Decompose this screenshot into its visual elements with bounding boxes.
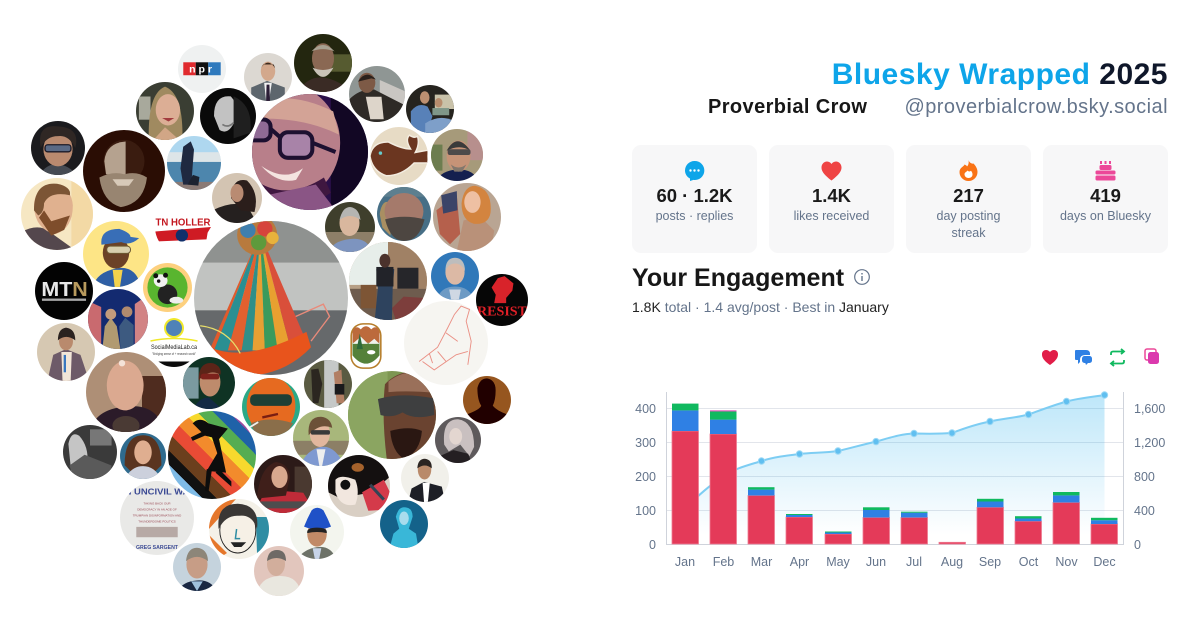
title: Bluesky Wrapped 2025: [832, 58, 1168, 91]
profile display name: Proverbial Crow: [708, 96, 867, 118]
avatar: man in suit: [244, 53, 292, 101]
x axis month labels: Nov: [1055, 555, 1078, 569]
avatar: book cover An Uncivil War: TAKING BACK OUR: [143, 502, 171, 506]
icon: flame: [960, 160, 978, 181]
avatar: black and white woman: [200, 88, 256, 144]
avatar: woman by fireplace: [349, 242, 427, 320]
avatar: person on the beach: [167, 136, 221, 190]
avatar: cartoon face with teal and orange: [209, 499, 269, 559]
avatar: bearded man in blue light: [377, 187, 431, 241]
avatar: hooded blue figure: [380, 500, 428, 548]
stat value: 60 · 1.2K: [656, 185, 733, 206]
avatar: chocolate whale: [370, 127, 428, 185]
y axis left labels: 300: [635, 436, 656, 450]
avatar: spaniel dog: [328, 455, 390, 517]
avatar: woman in red dress broadcast: [254, 455, 312, 513]
avatar: handshake in front of flags: [88, 289, 148, 349]
x axis month labels: Aug: [941, 555, 963, 569]
x axis month labels: Feb: [713, 555, 734, 569]
stat value: 1.4K: [812, 185, 851, 206]
stat label: streak: [951, 226, 986, 240]
stat card: day posting streak: [906, 145, 1031, 253]
cumulative line: [685, 395, 1104, 509]
bars: replies: [672, 410, 1118, 534]
avatar: NPR logo: [178, 45, 226, 93]
legend: quotes squares: [1145, 349, 1159, 364]
y axis right labels: 400: [1134, 504, 1155, 518]
avatar: girl with flag painting: [433, 183, 501, 251]
avatar: smiling man with glasses in garden: [431, 129, 483, 181]
avatar: blonde woman selfie: [136, 82, 194, 140]
cumulative area: [685, 395, 1104, 544]
stat label: posts · replies: [656, 209, 733, 223]
avatar: party hat, largest bubble: [194, 221, 348, 375]
avatar: group on a porch: [406, 85, 454, 133]
avatar: MTN logo: MTN: [41, 279, 88, 301]
avatar: book cover An Uncivil War: TRUMPIAN DISINFORMATION AND: [133, 514, 181, 518]
avatar: sunglasses man close-up: [348, 371, 436, 459]
x axis month labels: May: [826, 555, 851, 569]
avatar: park badge: [350, 323, 382, 369]
bars: likes: [672, 431, 1118, 544]
avatar: book cover An Uncivil War: AN UNCIVIL WAR: [118, 487, 196, 496]
avatar: man with glasses and dark hair: [31, 121, 85, 175]
engagement chart: stacked bars with cumulative area line: [635, 391, 1165, 569]
avatar: rainbow silhouette of Nancy Drew: [168, 411, 256, 499]
icon: info: [854, 269, 870, 285]
avatar: man in black blazer: [401, 454, 449, 502]
avatar: man with cigar: [294, 34, 352, 92]
bars: reposts: [672, 404, 1118, 532]
stat value: 217: [953, 185, 984, 206]
avatar: side-profile man with beard: [21, 178, 93, 250]
avatar: TN Holler logo: [155, 217, 211, 242]
y axis right labels: [1134, 402, 1165, 552]
icon: heart: [822, 162, 842, 180]
avatar: dark-haired woman with glasses: [212, 173, 262, 223]
y axis left labels: 200: [635, 470, 656, 484]
legend: reposts arrows: [1111, 349, 1124, 366]
bars: quotes: [710, 410, 736, 411]
avatar: book cover An Uncivil War: THUNDERDOME POLITICS: [138, 519, 176, 523]
legend: likes heart: [1042, 350, 1058, 365]
chart legend icons: [1042, 348, 1159, 367]
y axis left labels: 0: [649, 538, 656, 552]
x axis month labels: Sep: [979, 555, 1001, 569]
avatar: George Takei portrait: [325, 202, 375, 252]
avatar: man in white sweater: [254, 546, 304, 596]
stat label: day posting: [937, 209, 1000, 223]
stat label: likes received: [794, 209, 869, 223]
avatar: smiling man on blue: [431, 252, 479, 300]
avatar: MTN logo: [35, 262, 93, 320]
y axis right labels: 0: [1134, 538, 1141, 552]
avatar: line drawing on pale ground: [404, 301, 488, 385]
avatar: book cover An Uncivil War: DEMOCRACY IN AN AGE OF: [137, 508, 177, 512]
y axis left labels: 400: [635, 402, 656, 416]
avatar: woman with red sunglasses: [183, 357, 235, 409]
avatar: panda cartoon: [143, 263, 192, 312]
avatar bubble cluster: [21, 34, 528, 596]
avatar: painted orange face: [242, 378, 300, 436]
stat card: likes received: [769, 145, 894, 253]
avatar: man on dark sofa: [349, 66, 405, 122]
icon: birthday cake: [1096, 161, 1116, 180]
y axis right labels: 1,200: [1134, 436, 1165, 450]
avatar: woman with flower crown: [37, 323, 95, 381]
avatar: cartoon man in blue cap: [83, 221, 149, 287]
avatar: bearded man sepia: [83, 130, 165, 212]
section heading: Your Engagement: Your Engagement: [632, 264, 844, 292]
legend: replies bubbles: [1075, 350, 1092, 365]
avatar: couple holding hands by waterfall: [304, 360, 352, 408]
avatar: black and white woman at piano: [63, 425, 117, 479]
avatar: book cover An Uncivil War: [120, 481, 194, 555]
y axis right labels: 800: [1134, 470, 1155, 484]
x axis month labels: Dec: [1093, 555, 1116, 569]
x axis month labels: Jan: [675, 555, 695, 569]
avatar: RESIST fist logo: RESIST: [477, 304, 528, 320]
stat card: days on Bluesky: [1043, 145, 1168, 253]
x axis month labels: Oct: [1019, 555, 1039, 569]
cumulative line points: [758, 392, 1108, 464]
avatar: woman in blue blazer with glasses: [293, 410, 349, 466]
avatar: RESIST fist logo: [476, 274, 528, 326]
x axis month labels: Jul: [906, 555, 922, 569]
y axis right labels: 1,600: [1134, 402, 1165, 416]
avatar: silhouette on brown: [463, 376, 511, 424]
avatar: man in party hat: [290, 505, 344, 559]
profile handle: @proverbialcrow.bsky.social: [904, 96, 1168, 118]
y axis left labels: [635, 402, 656, 552]
stat card: posts and replies: [632, 145, 757, 253]
x axis month labels: Mar: [751, 555, 772, 569]
icon: chat bubble: [685, 161, 704, 181]
stat value: 419: [1090, 185, 1121, 206]
x axis month labels: [675, 555, 1116, 569]
avatar: blonde woman monochrome: [435, 417, 481, 463]
avatar: Robert Reich portrait: [173, 543, 221, 591]
avatar: book cover An Uncivil War: GREG SARGENT: [136, 545, 179, 551]
stat label: [937, 209, 1000, 240]
avatar: woman with wavy brown hair: [120, 433, 166, 479]
stat label: days on Bluesky: [1060, 209, 1151, 223]
avatar: bald man: [86, 352, 166, 432]
avatar: large smiling man with glasses: [252, 94, 368, 210]
x axis month labels: Apr: [790, 555, 809, 569]
avatar: SocialMediaLab logo: [150, 318, 198, 367]
engagement summary: 1.8K total · 1.4 avg/post · Best in January: [632, 299, 889, 315]
x axis month labels: Jun: [866, 555, 886, 569]
y axis left labels: 100: [635, 504, 656, 518]
avatar: NPR logo: npr: [189, 63, 215, 75]
